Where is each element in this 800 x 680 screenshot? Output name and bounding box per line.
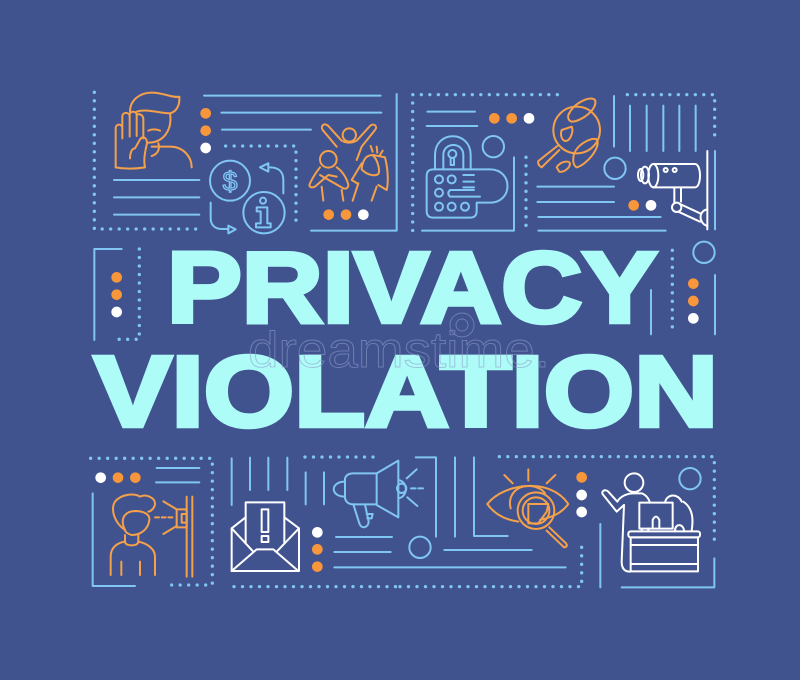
icon: people at desk with computer: [602, 473, 700, 572]
icon: eye under magnifier: [487, 469, 568, 547]
panel: top left: [94, 92, 397, 233]
icon: dollar coin: [210, 161, 250, 201]
frame lines and dots: [413, 95, 715, 232]
icon: megaphone: [334, 461, 406, 527]
icon: dollar coin: $: [223, 166, 238, 196]
icon: security camera: [638, 164, 707, 226]
panel: middle left accents: [94, 249, 139, 340]
panel: top right: [413, 95, 715, 232]
watermark: dreamstime.: [248, 322, 550, 378]
panel: bottom left: [91, 457, 566, 587]
icon: person watched by camera: [111, 495, 192, 577]
heading line: violation: VIOLATION: [94, 336, 718, 448]
icon: magnifier over footprints: [538, 99, 600, 172]
frame lines and dots: [94, 92, 397, 231]
panel: bottom right: [400, 457, 714, 587]
arrow: exchange down: [211, 203, 236, 233]
panel: middle right accents: [651, 242, 715, 334]
icon: group of people: [309, 124, 388, 201]
frame lines and dots: [400, 457, 714, 587]
icon: information coin: [243, 192, 285, 233]
arrow: exchange up: [260, 163, 283, 193]
icon: person raising hand to refuse: [116, 93, 192, 169]
frame lines and dots: [91, 457, 566, 587]
heading line: privacy: PRIVACY: [167, 232, 657, 344]
title: [94, 232, 718, 448]
icon: envelope with exclamation mark: [232, 502, 299, 571]
icon: megaphone sound rays: [407, 469, 424, 506]
icon: padlock with keypad and hand: [427, 136, 507, 218]
